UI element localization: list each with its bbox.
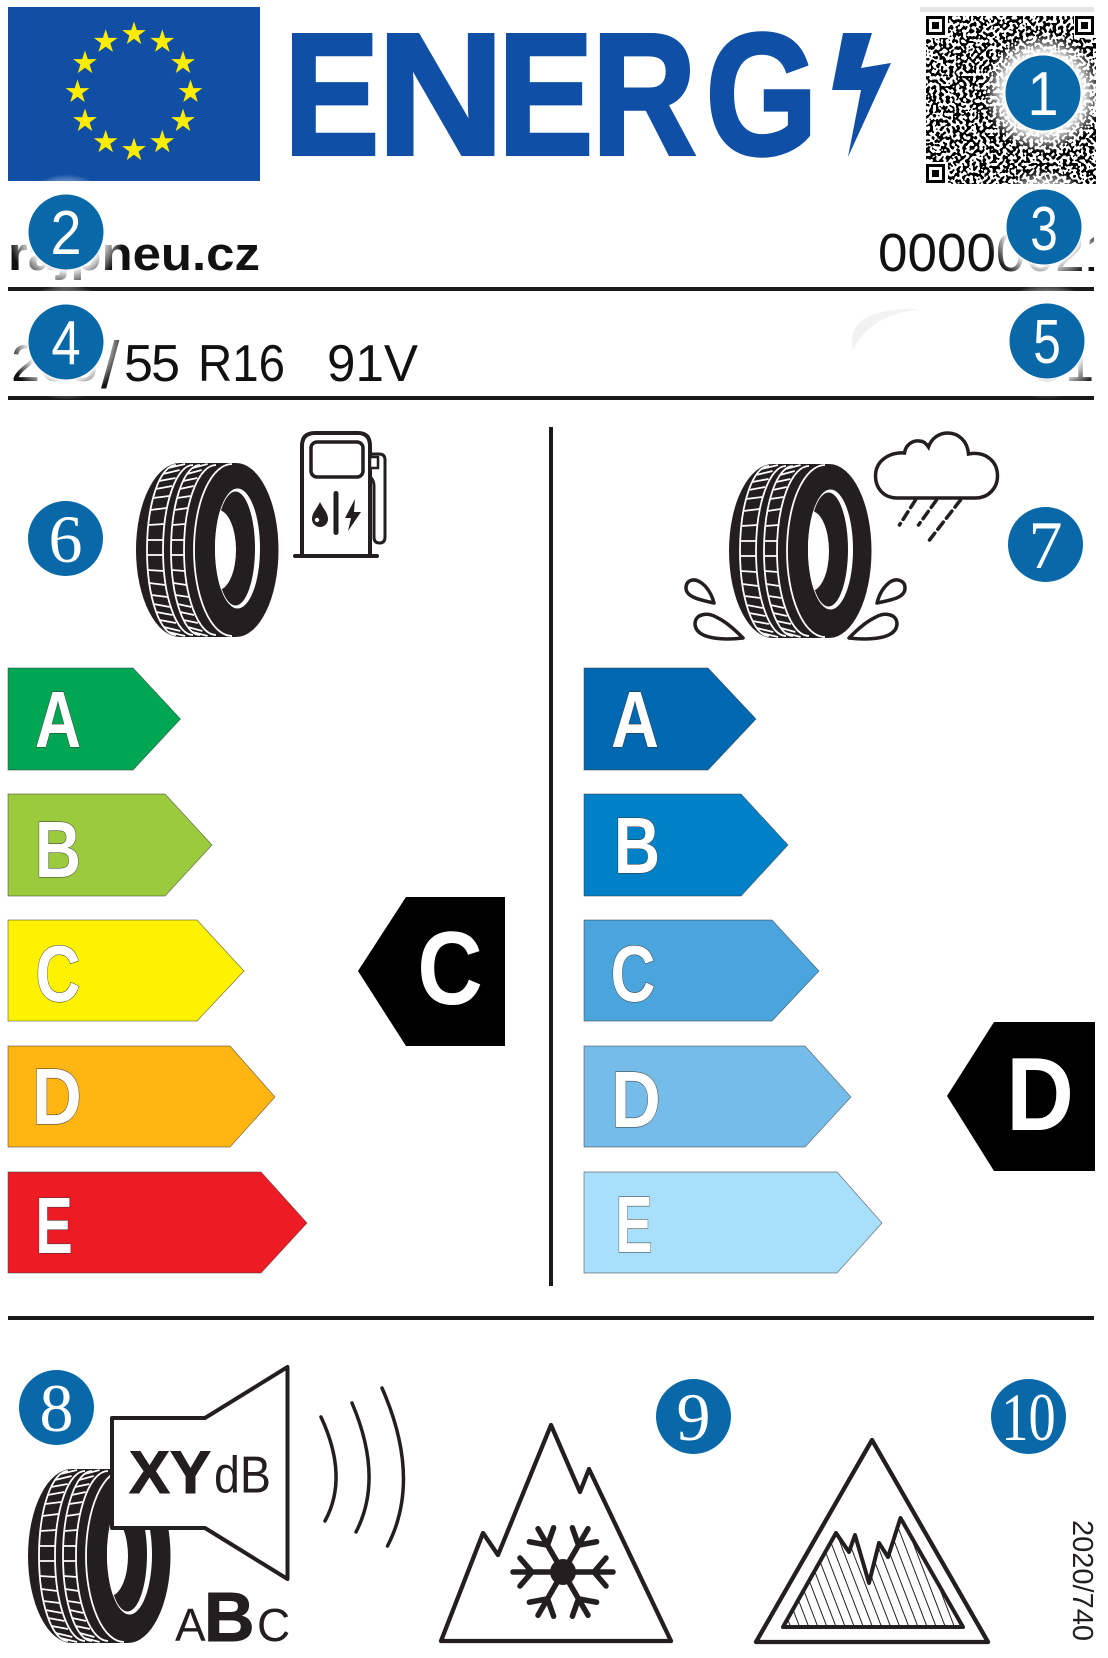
icon: noise speaker: dB xyxy=(214,1446,271,1504)
title: ENERG with lightning bolt: R xyxy=(592,0,696,191)
divider 1 xyxy=(8,287,1094,291)
bar C xyxy=(8,920,244,1021)
tyre size: 91V xyxy=(327,335,418,393)
regulation number: 2020/740 xyxy=(1066,1520,1098,1641)
noise class ABC xyxy=(175,1578,290,1656)
icon: noise speaker: XY xyxy=(129,1439,211,1506)
icon: noise speaker xyxy=(112,1367,288,1579)
EU flag xyxy=(8,7,260,181)
wet grip scale xyxy=(584,668,882,1273)
tyre size: 205 xyxy=(11,335,98,393)
bar A xyxy=(8,668,180,770)
callout 6 xyxy=(28,501,103,577)
fuel rating pointer C xyxy=(358,897,505,1046)
bar E: E xyxy=(615,1179,653,1269)
callout 1 xyxy=(983,33,1103,153)
tyre size: / xyxy=(101,328,120,402)
callout 4: 4 xyxy=(51,309,81,378)
callout 9 xyxy=(656,1379,731,1455)
QR code xyxy=(920,7,1097,185)
wet grip rating pointer D: D xyxy=(1006,1035,1074,1152)
icon: fuel tyre xyxy=(136,463,278,637)
wet grip rating pointer D xyxy=(947,1022,1095,1171)
bar A: A xyxy=(611,674,659,764)
bar A xyxy=(584,668,756,770)
callout 10: 10 xyxy=(1001,1380,1056,1455)
tyre size: 55 xyxy=(124,335,180,393)
tyre size: R16 xyxy=(198,335,285,393)
bar D xyxy=(8,1046,275,1147)
fuel rating pointer C: C xyxy=(417,910,483,1026)
tyre class: C1 xyxy=(1028,335,1094,393)
bar E xyxy=(584,1172,882,1273)
noise class ABC: C xyxy=(257,1599,290,1651)
callout 6: 6 xyxy=(48,501,82,577)
callout 5 xyxy=(989,283,1105,399)
title: ENERG with lightning bolt: N xyxy=(377,0,504,191)
bar C: C xyxy=(610,930,656,1019)
bar B: B xyxy=(614,801,660,891)
bar C xyxy=(584,920,819,1021)
divider 2 xyxy=(8,396,1094,400)
bar C: C xyxy=(35,930,81,1019)
bar B xyxy=(8,794,212,896)
title: ENERG with lightning bolt: E xyxy=(498,0,593,191)
faint smudge xyxy=(852,309,920,350)
bar B xyxy=(584,794,788,896)
callout 3: 3 xyxy=(1030,194,1058,263)
callout 2 xyxy=(8,174,124,290)
callout 1: 1 xyxy=(1027,60,1059,129)
icon: wet grip tyre xyxy=(729,464,872,638)
bar B: B xyxy=(35,805,81,895)
bar E: E xyxy=(35,1180,73,1270)
icon: water splashes xyxy=(686,580,905,639)
callout 3 xyxy=(986,169,1102,285)
supplier name: rajpneu.cz xyxy=(8,227,260,280)
bar D xyxy=(584,1046,851,1147)
bar E xyxy=(8,1172,307,1273)
bar A: A xyxy=(35,675,81,765)
bar D: D xyxy=(611,1054,661,1144)
vertical divider xyxy=(549,427,553,1286)
divider 3 xyxy=(8,1316,1094,1320)
callout 5: 5 xyxy=(1033,307,1061,376)
icon: fuel pump xyxy=(293,433,385,558)
callout 4 xyxy=(8,284,124,400)
callout 8 xyxy=(19,1370,94,1446)
title: ENERG with lightning bolt xyxy=(284,0,891,191)
noise class ABC: A xyxy=(175,1599,206,1651)
callout 7: 7 xyxy=(1028,507,1062,583)
callout 7 xyxy=(1008,507,1083,583)
noise class ABC: B xyxy=(204,1578,255,1656)
callout 2: 2 xyxy=(50,199,82,268)
title: ENERG with lightning bolt: E xyxy=(284,0,379,191)
bar D: D xyxy=(32,1051,82,1141)
icon: sound waves xyxy=(321,1388,403,1546)
icon: noise tyre xyxy=(28,1469,170,1643)
fuel efficiency scale xyxy=(8,668,307,1273)
icon: snow mountain xyxy=(441,1425,671,1641)
title: ENERG with lightning bolt: G xyxy=(706,0,817,191)
callout 8: 8 xyxy=(40,1370,74,1446)
icon: ice mountain xyxy=(756,1440,988,1642)
callout 9: 9 xyxy=(676,1379,710,1455)
icon: rain cloud xyxy=(876,433,998,540)
